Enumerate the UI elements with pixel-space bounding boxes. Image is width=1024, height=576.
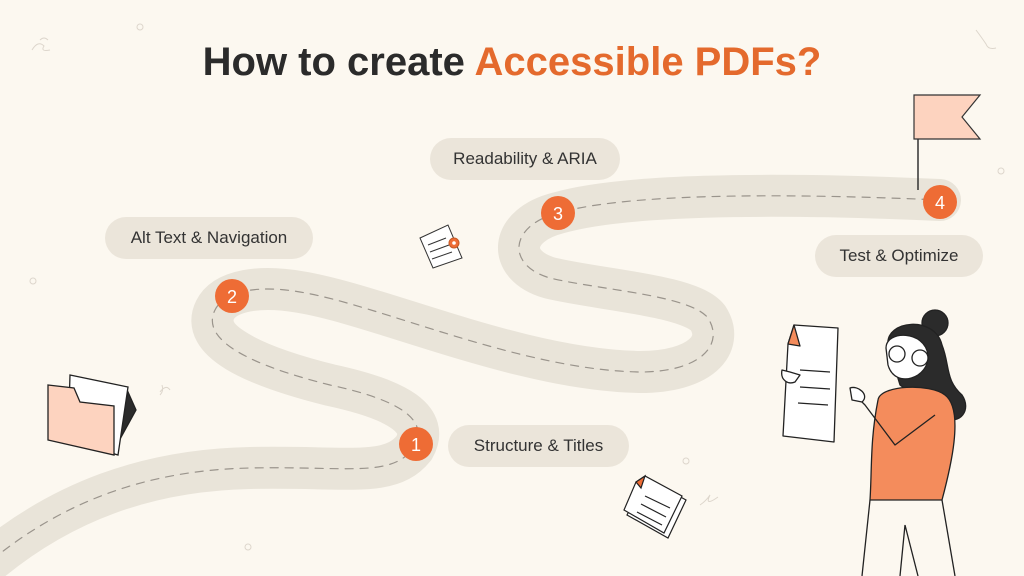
- step markers: 2: [227, 287, 237, 307]
- step markers: 1: [411, 435, 421, 455]
- label: Test & Optimize: Test & Optimize: [839, 246, 959, 265]
- step markers: 4: [935, 193, 945, 213]
- label: Alt Text & Navigation: Alt Text & Navigation: [131, 228, 287, 247]
- icon: documents: [624, 476, 686, 538]
- flag: [914, 95, 980, 190]
- woman illustration: [782, 310, 966, 576]
- label: Alt Text & Navigation: [105, 217, 313, 259]
- title: How to create Accessible PDFs?: [203, 40, 821, 84]
- label: Readability & ARIA: [430, 138, 620, 180]
- step markers: [215, 185, 957, 461]
- label: Structure & Titles: Structure & Titles: [474, 436, 603, 455]
- label: Readability & ARIA: Readability & ARIA: [453, 149, 597, 168]
- label: Test & Optimize: [815, 235, 983, 277]
- icon: folder: [48, 375, 136, 455]
- step markers: 3: [553, 204, 563, 224]
- label: Structure & Titles: [448, 425, 629, 467]
- road: [0, 196, 940, 570]
- icon: document with gear: [420, 225, 462, 268]
